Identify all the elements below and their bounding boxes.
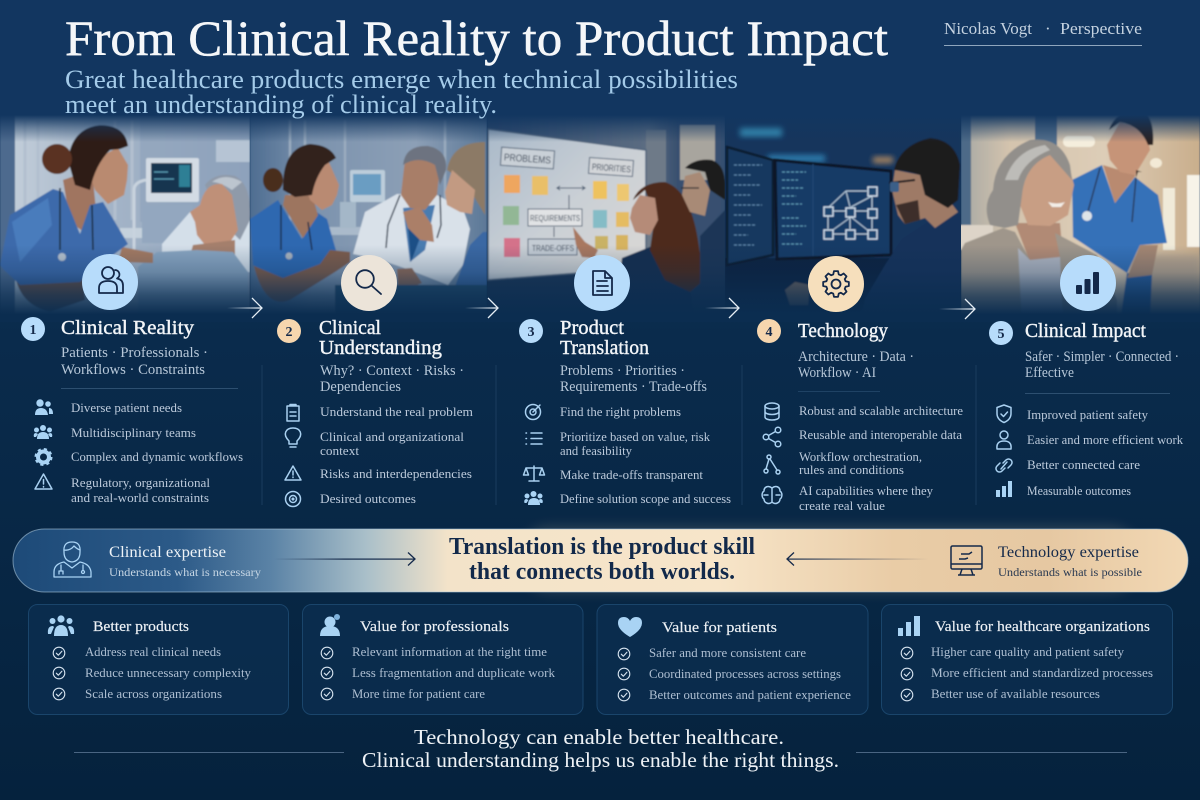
step number 5: 5 <box>998 327 1004 342</box>
list: clinical understanding: Understand the real problem <box>320 404 473 419</box>
title: From Clinical Reality to Product Impact <box>65 10 888 66</box>
card: better products <box>28 604 288 714</box>
step number 3 <box>519 319 543 343</box>
list: technology: Robust and scalable architecture <box>799 403 963 418</box>
step number 1: 1 <box>30 323 36 338</box>
list: clinical reality: Complex and dynamic workflows <box>71 449 243 464</box>
subtitle: meet an understanding of clinical reality. <box>65 90 497 119</box>
list: technology: Workflow orchestration, <box>799 449 922 464</box>
subtitle: clinical understanding <box>320 363 464 395</box>
list: clinical reality: and real-world constraints <box>71 490 209 505</box>
list: value for patients <box>618 646 851 702</box>
panel: product translation <box>519 317 731 506</box>
photo: whiteboard workshop <box>487 118 725 292</box>
arrow: step 4 to 5 <box>939 299 975 319</box>
list: clinical reality <box>34 399 243 505</box>
photo: engineer at monitors <box>725 124 960 306</box>
list: value for professionals: More time for patient care <box>352 687 485 701</box>
list: clinical impact: Better connected care <box>1027 457 1140 472</box>
card: value for professionals <box>302 604 583 714</box>
central message: that connects both worlds. <box>469 559 735 585</box>
photo: whiteboard workshop: PRIORITIES <box>592 162 631 174</box>
heading: value for patients: Value for patients <box>662 620 777 636</box>
list: value for healthcare organizations: Higher care quality and patient safety <box>931 645 1125 659</box>
heading: product translation: Product <box>560 317 624 339</box>
subtitle: clinical understanding: Why? · Context · Risks · <box>320 363 464 379</box>
text: clinical expertise <box>109 544 261 579</box>
list: clinical understanding: Clinical and organizational <box>320 429 464 444</box>
panel: clinical impact <box>989 320 1183 498</box>
icon: bars <box>898 616 920 636</box>
subtitle: product translation <box>560 363 707 395</box>
subtitle: clinical understanding: Dependencies <box>320 379 401 395</box>
step 3 icon circle <box>574 255 630 311</box>
list: product translation: Prioritize based on value, risk <box>560 429 710 444</box>
subtitle: product translation: Requirements · Trade-offs <box>560 379 707 395</box>
photo: whiteboard workshop: PROBLEMS <box>504 152 551 167</box>
author tag: Nicolas Vogt <box>944 19 1032 38</box>
subtitle: technology: Architecture · Data · <box>798 349 914 365</box>
heading: clinical impact: Clinical Impact <box>1025 320 1146 342</box>
icon: heart <box>618 617 642 637</box>
step number 4: 4 <box>766 325 772 340</box>
list: better products: Address real clinical needs <box>85 645 221 659</box>
heading: product translation: Translation <box>560 337 649 359</box>
list: technology: create real value <box>799 498 885 513</box>
list: better products: Reduce unnecessary complexity <box>85 666 252 680</box>
panel: clinical understanding <box>277 317 473 506</box>
list: value for patients: Safer and more consistent care <box>649 646 806 660</box>
list: technology: Reusable and interoperable data <box>799 427 962 442</box>
list: value for professionals: Relevant information at the right time <box>352 645 547 659</box>
photo: nurse with patient <box>0 112 250 322</box>
list: product translation: Find the right problems <box>560 404 681 419</box>
list: clinical understanding: Desired outcomes <box>320 491 416 506</box>
text: technology expertise: Understands what is possible <box>998 565 1142 579</box>
photo: whiteboard workshop: TRADE-OFFS <box>532 243 574 253</box>
photo: whiteboard workshop: REQUIREMENTS <box>530 213 580 223</box>
list: technology: AI capabilities where they <box>799 483 933 498</box>
icon: clinician <box>54 542 91 577</box>
subtitle: technology: Workflow · AI <box>798 365 876 381</box>
subtitle: clinical reality: Patients · Professionals · <box>61 345 208 361</box>
step number 2 <box>277 319 301 343</box>
heading: better products: Better products <box>93 619 189 635</box>
heading: value for healthcare organizations: Value for healthcare organizations <box>935 619 1150 635</box>
heading: clinical understanding: Understanding <box>319 337 442 359</box>
text: technology expertise <box>998 544 1142 579</box>
list: clinical impact: Improved patient safety <box>1027 407 1148 422</box>
closing statement: Clinical understanding helps us enable the right things. <box>362 748 839 772</box>
list: product translation: Make trade-offs transparent <box>560 467 703 482</box>
heading: value for professionals: Value for professionals <box>360 619 509 635</box>
heading: clinical reality: Clinical Reality <box>61 317 194 339</box>
list: product translation <box>524 404 731 506</box>
arrow: step 1 to 2 <box>227 298 262 318</box>
central message <box>449 534 755 585</box>
subtitle: clinical reality: Workflows · Constraints <box>61 362 205 378</box>
list: clinical impact: Measurable outcomes <box>1027 483 1131 498</box>
step number 1 <box>21 317 45 341</box>
photo: patient and nurse smiling <box>961 116 1200 312</box>
heading: technology: Technology <box>798 320 888 342</box>
subtitle: clinical impact: Effective <box>1025 365 1074 381</box>
list: value for healthcare organizations: Better use of available resources <box>931 687 1100 701</box>
list: clinical impact: Easier and more efficient work <box>1027 432 1183 447</box>
author tag: · <box>1045 19 1051 38</box>
icon: professional <box>320 614 340 636</box>
list: clinical impact <box>996 405 1183 498</box>
panel: technology <box>757 319 963 513</box>
text: clinical expertise: Understands what is necessary <box>109 565 261 579</box>
list: product translation: Define solution scope and success <box>560 491 731 506</box>
list: clinical understanding <box>285 404 473 506</box>
author tag: Perspective <box>1060 19 1142 38</box>
subtitle: clinical impact <box>1025 349 1179 381</box>
subtitle: clinical reality <box>61 345 208 378</box>
arrow: step 3 to 4 <box>705 298 739 318</box>
step number 3: 3 <box>528 325 534 340</box>
subtitle: product translation: Problems · Priorities · <box>560 363 685 379</box>
text: technology expertise: Technology expertise <box>998 544 1139 561</box>
list: value for patients: Coordinated processes across settings <box>649 667 841 681</box>
card: value for healthcare organizations <box>882 604 1172 714</box>
translation band <box>13 526 1188 592</box>
step 1 icon circle <box>82 254 138 310</box>
list: value for professionals <box>321 645 556 701</box>
list: clinical understanding: context <box>320 443 359 458</box>
icon: team <box>48 615 74 636</box>
text: clinical expertise: Clinical expertise <box>109 544 226 561</box>
arrow: to centre from right <box>787 552 929 566</box>
list: better products <box>53 645 252 701</box>
panel: clinical reality <box>21 317 243 505</box>
list: value for healthcare organizations: More efficient and standardized processes <box>931 666 1153 680</box>
closing statement: Technology can enable better healthcare. <box>414 725 784 749</box>
photo strip <box>0 116 1200 312</box>
list: clinical understanding: Risks and interdependencies <box>320 466 472 481</box>
heading: product translation <box>560 317 649 359</box>
list: value for healthcare organizations <box>901 645 1153 701</box>
list: product translation: and feasibility <box>560 443 632 458</box>
step 4 icon circle <box>808 256 864 312</box>
subtitle <box>65 65 738 119</box>
author tag <box>944 19 1142 46</box>
list: better products: Scale across organizations <box>85 687 222 701</box>
photo: care team discussion <box>250 112 487 322</box>
central message: Translation is the product skill <box>449 534 755 560</box>
step 2 icon circle <box>341 255 397 311</box>
heading: clinical understanding <box>319 317 442 359</box>
step number 5 <box>989 321 1013 345</box>
list: value for professionals: Less fragmentation and duplicate work <box>352 666 556 680</box>
step number 4 <box>757 319 781 343</box>
subtitle: clinical impact: Safer · Simpler · Connected · <box>1025 349 1179 365</box>
step number 2: 2 <box>286 325 292 340</box>
list: clinical reality: Diverse patient needs <box>71 400 182 415</box>
closing statement <box>362 725 839 772</box>
arrow: step 2 to 3 <box>465 298 498 318</box>
heading: clinical understanding: Clinical <box>319 317 381 339</box>
list: technology: rules and conditions <box>799 462 904 477</box>
step 5 icon circle <box>1060 255 1116 311</box>
icon: monitor <box>951 546 982 575</box>
list: clinical reality: Multidisciplinary teams <box>71 425 196 440</box>
subtitle: Great healthcare products emerge when technical possibilities <box>65 65 738 94</box>
list: technology <box>762 403 963 513</box>
list: value for patients: Better outcomes and patient experience <box>649 688 851 702</box>
arrow: to centre <box>274 552 415 566</box>
card: value for patients <box>597 604 868 714</box>
subtitle: technology <box>798 349 914 381</box>
list: clinical reality: Regulatory, organizational <box>71 475 210 490</box>
